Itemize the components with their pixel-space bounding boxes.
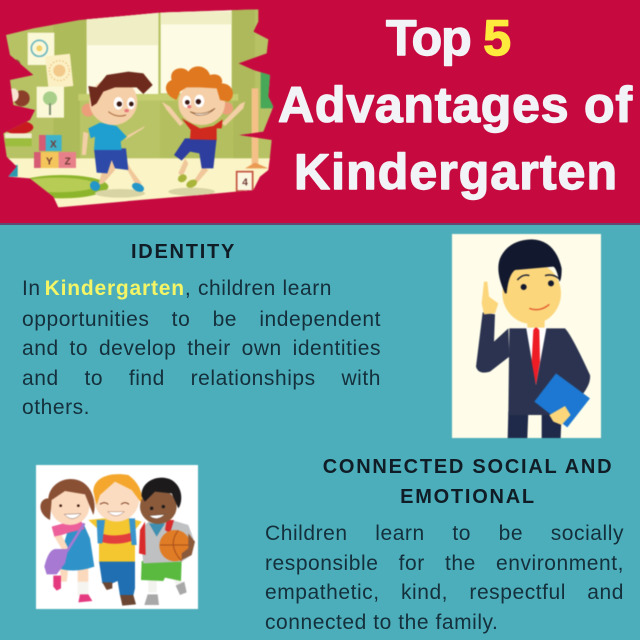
basketball <box>159 530 191 561</box>
section: social text: responsible for the environment, <box>265 552 624 575</box>
blond boy shirt <box>88 518 142 562</box>
blond boy legs <box>99 561 135 596</box>
section: identity text: InKindergarten, children learn <box>22 277 332 300</box>
hand holding folder <box>549 406 571 425</box>
girl head <box>51 488 89 525</box>
window <box>87 12 158 95</box>
section: social heading <box>323 456 613 508</box>
jacket <box>508 328 590 415</box>
neck <box>527 318 545 328</box>
lamp <box>252 88 258 167</box>
header banner <box>0 0 640 225</box>
boy left <box>82 72 153 194</box>
shorts <box>141 561 182 581</box>
hair <box>498 239 562 293</box>
title: Top 5 <box>386 10 511 66</box>
title: Advantages of <box>278 77 632 133</box>
illustration: two boys dancing in classroom <box>2 8 274 208</box>
illustration: three children <box>35 464 199 610</box>
section: social text: connected to the family. <box>265 611 498 634</box>
section: social heading: CONNECTED SOCIAL AND <box>323 456 613 478</box>
floor <box>8 158 270 208</box>
illustration: businessman pointing up <box>451 233 602 439</box>
block letters: X <box>50 139 57 150</box>
shirt <box>140 520 193 563</box>
red toy <box>3 121 33 134</box>
block letters: 4 <box>242 178 248 189</box>
teddy <box>15 58 21 64</box>
blond boy head <box>94 475 139 522</box>
head <box>140 489 177 524</box>
girl bag <box>67 523 84 552</box>
section: social heading: EMOTIONAL <box>400 486 536 508</box>
section: social text: Children learn to be socially <box>265 522 624 545</box>
arm raised <box>476 312 509 373</box>
block letters: Y <box>46 156 53 167</box>
girl dress <box>58 523 94 570</box>
number block <box>237 172 253 191</box>
room wall <box>0 7 280 160</box>
drawings <box>28 33 54 65</box>
girl arm <box>54 535 68 552</box>
girl legs and shoes <box>60 568 88 583</box>
section: identity text: opportunities to be independent <box>22 308 381 331</box>
section: identity heading: IDENTITY <box>131 241 236 263</box>
floor shadows <box>95 189 145 198</box>
folder <box>534 373 590 427</box>
face <box>502 263 561 324</box>
section: identity text <box>22 277 381 419</box>
legs <box>508 412 562 438</box>
section: social text <box>265 522 624 634</box>
dark-skinned boy legs and shoes <box>148 578 186 592</box>
blocks <box>45 134 62 152</box>
shirt and tie <box>526 327 547 385</box>
title: Kindergarten <box>294 144 617 200</box>
section: identity text: and to develop their own identities <box>22 337 381 360</box>
section: identity text: and to find relationships with <box>22 367 381 390</box>
title <box>278 10 633 200</box>
section: identity text: others. <box>22 396 90 419</box>
hand raised <box>482 282 498 314</box>
section: social text: empathetic, kind, respectful and <box>265 581 624 604</box>
block letters: Z <box>65 156 71 167</box>
block letters <box>46 139 248 189</box>
boy right <box>162 66 245 189</box>
